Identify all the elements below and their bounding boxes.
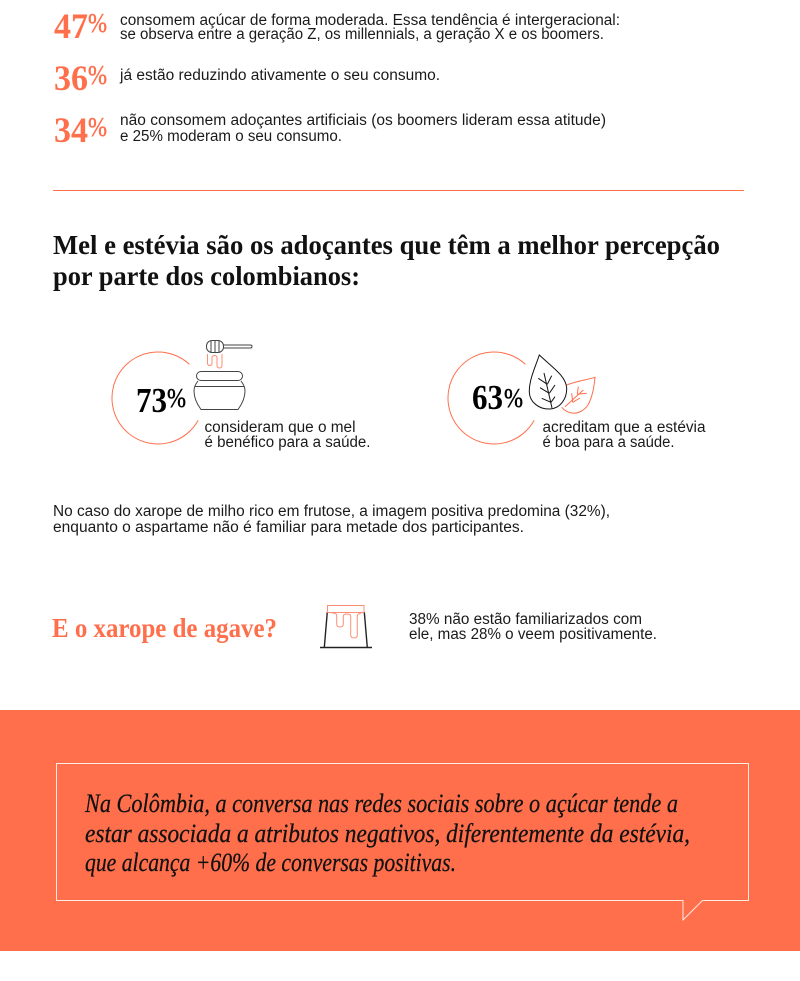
stat: 36% actively reducing: %	[88, 60, 107, 90]
stat: 73% honey: %	[167, 383, 186, 413]
stat: 73% honey: consideram que o mel	[204, 419, 356, 436]
text: high fructose corn syrup and aspartame: enquanto o aspartame não é familiar para metade dos participantes.	[53, 519, 524, 536]
stat: 36% actively reducing: 36	[54, 58, 88, 98]
heading: agave syrup: E o xarope de agave?	[52, 613, 277, 643]
stat: 63% stevia	[448, 352, 706, 451]
stat: 34% no artificial sweeteners: 34	[54, 110, 88, 150]
quote text: que alcança +60% de conversas positivas.	[85, 848, 456, 877]
stat: 63% stevia: 63	[472, 378, 503, 417]
panel: social media callout	[0, 710, 800, 951]
stat: 47% moderate consumption: se observa entre a geração Z, os millennials, a geração X e os boomers.	[120, 26, 604, 43]
circle arc	[112, 352, 198, 444]
stat: 36% actively reducing: já estão reduzindo ativamente o seu consumo.	[119, 67, 440, 84]
icon: stevia leaves	[529, 355, 595, 413]
stat: 47% moderate consumption	[54, 6, 620, 46]
quote text	[84, 789, 690, 877]
stat: 47% moderate consumption: %	[88, 8, 107, 38]
stat: 63% stevia: é boa para a saúde.	[542, 434, 674, 451]
stat: 34% no artificial sweeteners: %	[88, 112, 107, 142]
stat: 63% stevia: %	[504, 383, 523, 413]
text: high fructose corn syrup and aspartame: No caso do xarope de milho rico em frutose, a imagem positiva predomina (32%),	[53, 503, 610, 520]
stat: 63% stevia: acreditam que a estévia	[542, 419, 706, 436]
stat: 36% actively reducing	[54, 58, 440, 98]
speech bubble outline	[56, 764, 748, 920]
heading: honey and stevia perception: por parte dos colombianos:	[53, 261, 360, 291]
stat: 73% honey: é benéfico para a saúde.	[204, 434, 370, 451]
stat: 34% no artificial sweeteners: não consomem adoçantes artificiais (os boomers lideram essa atitude)	[120, 112, 606, 129]
heading: honey and stevia perception	[53, 230, 720, 291]
text: high fructose corn syrup and aspartame	[53, 503, 610, 536]
circle arc	[448, 352, 534, 444]
stat: 34% no artificial sweeteners: e 25% moderam o seu consumo.	[120, 128, 342, 145]
text: agave familiarity: ele, mas 28% o veem positivamente.	[409, 626, 657, 643]
stat: 47% moderate consumption: consomem açúcar de forma moderada. Essa tendência é intergeracional:	[120, 12, 620, 29]
quote text: Na Colômbia, a conversa nas redes sociais sobre o açúcar tende a	[84, 789, 678, 818]
stat: 47% moderate consumption: 47	[54, 6, 88, 46]
stat: 34% no artificial sweeteners	[54, 110, 606, 150]
icon: honey dipper and pot	[194, 340, 252, 410]
heading: honey and stevia perception: Mel e estévia são os adoçantes que têm a melhor percepção	[53, 230, 720, 260]
text: agave familiarity: 38% não estão familiarizados com	[409, 611, 642, 628]
icon: agave syrup container	[320, 606, 372, 648]
quote text: estar associada a atributos negativos, diferentemente da estévia,	[85, 819, 690, 848]
stat: 73% honey	[112, 340, 370, 451]
text: agave familiarity	[409, 611, 657, 643]
stat: 73% honey: 73	[136, 381, 167, 420]
